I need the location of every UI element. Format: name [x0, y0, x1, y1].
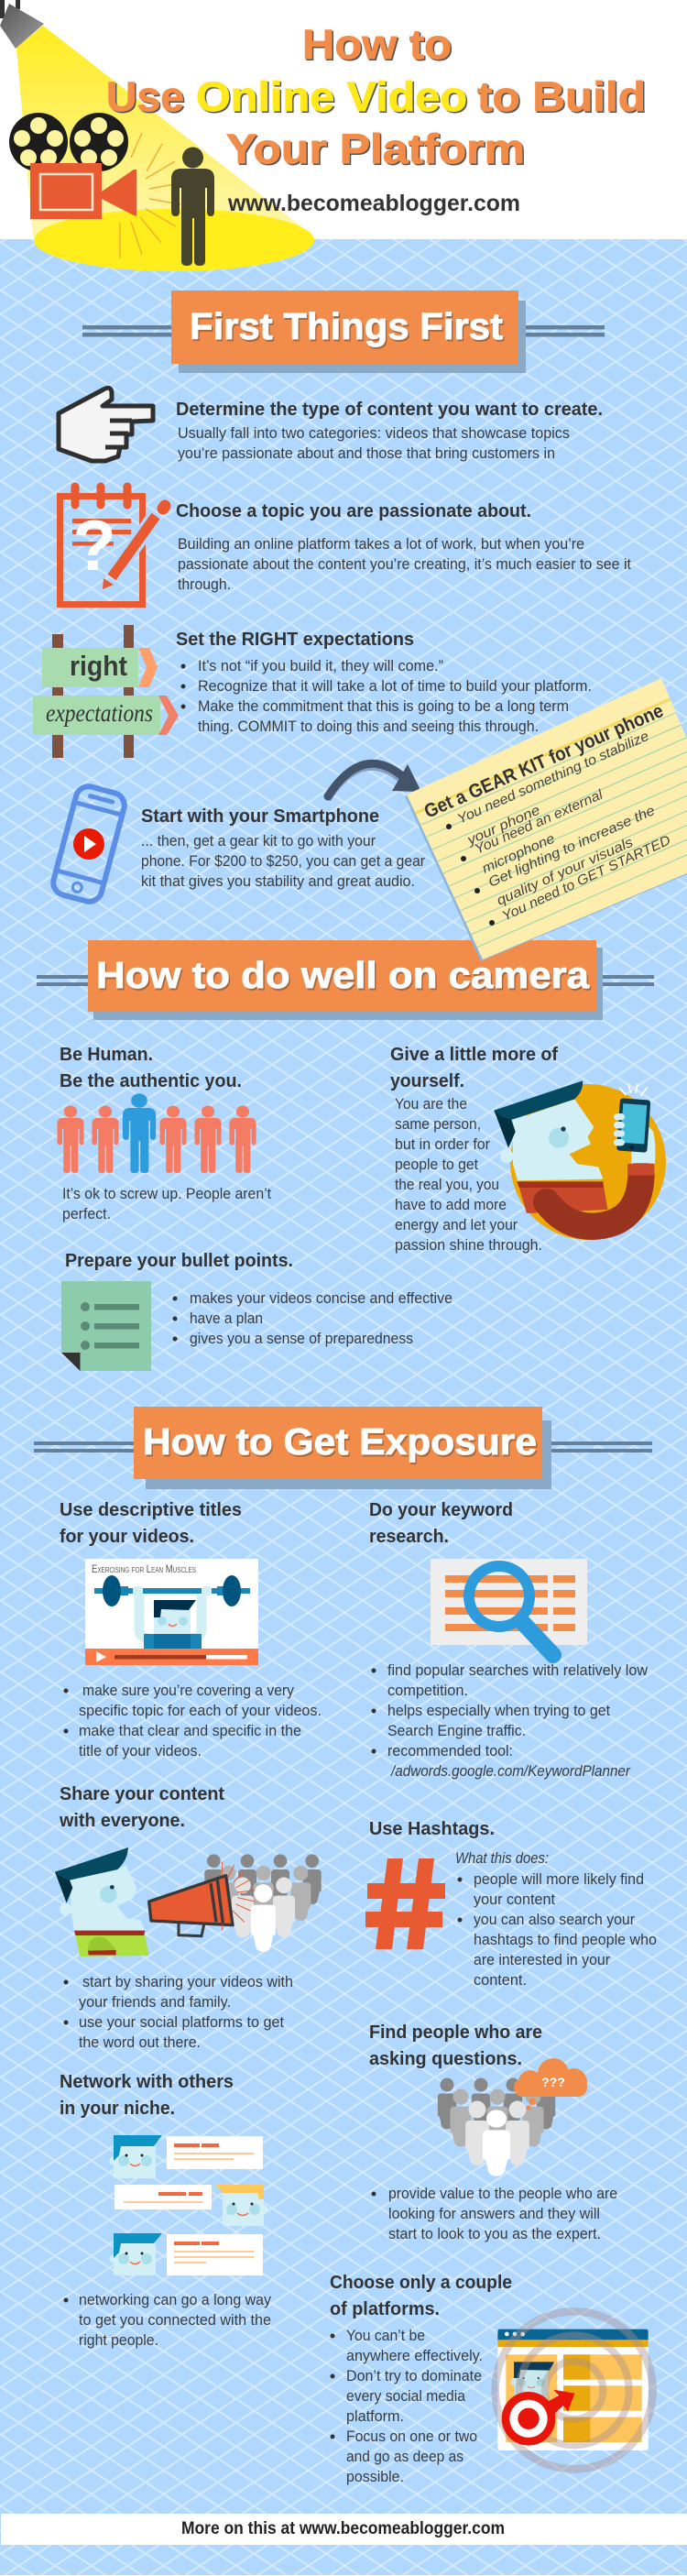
- note card: get a gear kit: quality of your visuals: [495, 834, 636, 909]
- note card: get a gear kit: Get lighting to increase the: [486, 803, 658, 891]
- icon: spotlight and stage: [0, 0, 314, 271]
- text block: choose a topic: Choose a topic you are passionate about.: [176, 501, 531, 521]
- heading: do your keyword research: research.: [369, 1527, 449, 1547]
- text block: start with your smartphone: Start with your Smartphone: [141, 806, 379, 827]
- icon: man holding phone: [494, 1080, 666, 1240]
- bullet list: hashtags: people will more likely find: [474, 1871, 644, 1888]
- text block: give a little more of yourself: same person,: [395, 1116, 481, 1133]
- heading: share your content: Share your content: [60, 1784, 224, 1804]
- text block: determine content type: [176, 400, 603, 462]
- text block: set the right expectations: thing. COMMIT to doing this and seeing this through.: [198, 718, 539, 735]
- note card: get a gear kit: [405, 663, 687, 961]
- bullet list: network: right people.: [79, 2332, 158, 2349]
- bullet list: descriptive titles: title of your videos.: [79, 1743, 202, 1759]
- bullet list: descriptive titles: [64, 1683, 322, 1759]
- title: Use: [106, 73, 184, 120]
- bullet list: hashtags: hashtags to find people who: [474, 1932, 657, 1948]
- text: it's ok to screw up: [62, 1186, 271, 1222]
- heading: do your keyword research: Do your keyword: [369, 1500, 513, 1520]
- title: Online Video: [196, 73, 467, 120]
- text block: give a little more of yourself: energy and let your: [395, 1217, 518, 1233]
- bullet list: hashtags: you can also search your: [474, 1912, 635, 1928]
- icon: notepad and pencil: [60, 487, 165, 605]
- bullet list: network: to get you connected with the: [79, 2312, 271, 2329]
- text block: set the right expectations: Recognize that it will take a lot of time to build your platform.: [198, 678, 592, 695]
- text block: give a little more of yourself: You are the: [395, 1096, 467, 1113]
- text: it's ok to screw up: It’s ok to screw up. People aren’t: [62, 1186, 271, 1202]
- bullet list: choose platforms: [330, 2328, 483, 2485]
- heading: find people who are asking questions: asking questions.: [369, 2049, 522, 2069]
- note card: get a gear kit: microphone: [480, 831, 557, 877]
- bullet list: share your content: start by sharing your videos with: [82, 1974, 293, 1990]
- note card: get a gear kit: You need something to stabilize: [455, 729, 651, 828]
- bullet list: choose platforms: You can’t be: [346, 2328, 425, 2344]
- bullet list: descriptive titles: make sure you’re covering a very: [82, 1683, 295, 1699]
- heading: use hashtags: Use Hashtags.: [369, 1819, 495, 1839]
- arrow: curved arrow to gear kit note: [327, 763, 420, 799]
- icon: film camera: [9, 113, 180, 258]
- bullet list: descriptive titles: specific topic for each of your videos.: [79, 1703, 322, 1719]
- bullet list: prepare your bullet points: gives you a sense of preparedness: [190, 1331, 413, 1347]
- bullet list: choose platforms: possible.: [346, 2469, 404, 2485]
- section banner: First Things First: First Things First: [190, 305, 503, 347]
- icon: pointing hand: [59, 388, 153, 461]
- bullet list: hashtags: are interested in your: [474, 1952, 610, 1968]
- heading: choose only a couple of platforms: [330, 2273, 512, 2319]
- bullet list: choose platforms: platform.: [346, 2408, 404, 2425]
- text block: choose a topic: through.: [178, 576, 231, 593]
- text: it's ok to screw up: perfect.: [62, 1206, 111, 1222]
- text block: determine content type: you’re passionate about and those that bring customers in: [178, 445, 555, 462]
- heading: network with others: in your niche.: [60, 2099, 175, 2119]
- section banner: How to Get Exposure: [34, 1407, 652, 1489]
- section banner: First Things First: [82, 290, 605, 373]
- icon: signpost right expectations: right: [70, 650, 127, 682]
- text block: start with your smartphone: ... then, get a gear kit to go with your: [141, 833, 376, 850]
- bullet list: network: [64, 2292, 272, 2349]
- icon: bullet list document: [61, 1281, 151, 1371]
- text block: give a little more of yourself: but in order for: [395, 1136, 490, 1153]
- section banner: How to Get Exposure: How to Get Exposure: [143, 1420, 537, 1463]
- bullet list: find people: start to look to you as the expert.: [388, 2226, 601, 2242]
- icon: smartphone with play button: [50, 784, 127, 904]
- note card: get a gear kit: Get a GEAR KIT for your phone: [421, 700, 667, 823]
- text block: set the right expectations: Make the commitment that this is going to be a long term: [198, 698, 569, 715]
- text block: start with your smartphone: kit that gives you stability and great audio.: [141, 873, 415, 890]
- icon: row of people with one highlighted: [57, 1093, 256, 1173]
- bullet list: keyword research: [372, 1662, 648, 1780]
- bullet list: prepare your bullet points: [172, 1290, 453, 1347]
- text block: give a little more of yourself: people to get: [395, 1156, 478, 1173]
- note card: get a gear kit: You need an external: [473, 786, 605, 858]
- bullet list: choose platforms: anywhere effectively.: [346, 2348, 483, 2364]
- text block: be human: [60, 1045, 242, 1091]
- bullet list: keyword research: /adwords.google.com/KeywordPlanner: [390, 1763, 631, 1780]
- bullet list: choose platforms: Focus on one or two: [346, 2428, 477, 2445]
- bullet list: share your content: [64, 1974, 293, 2051]
- text block: give a little more of yourself: Give a little more of: [390, 1045, 558, 1065]
- text block: start with your smartphone: phone. For $200 to $250, you can get a gear: [141, 853, 425, 870]
- text block: set the right expectations: It’s not “if you build it, they will come.”: [198, 658, 443, 674]
- bullet list: descriptive titles: make that clear and specific in the: [79, 1723, 301, 1739]
- heading: share your content: with everyone.: [59, 1811, 185, 1831]
- text block: be human: Be the authentic you.: [60, 1071, 242, 1091]
- text block: give a little more of yourself: [390, 1045, 558, 1254]
- section banner: How to do well on camera: [37, 940, 654, 1020]
- bullet list: keyword research: find popular searches with relatively low: [387, 1662, 648, 1679]
- footer bar: [1, 2514, 687, 2545]
- bullet list: keyword research: competition.: [387, 1683, 468, 1699]
- title: Your Platform: [226, 126, 525, 172]
- bullet list: network: networking can go a long way: [79, 2292, 272, 2308]
- heading: choose only a couple of platforms: Choose only a couple: [330, 2273, 512, 2293]
- text block: give a little more of yourself: the real you, you: [395, 1177, 499, 1193]
- text block: set the right expectations: [176, 630, 592, 735]
- text block: choose a topic: [176, 501, 631, 593]
- bullet list: keyword research: recommended tool:: [387, 1743, 513, 1759]
- text block: choose a topic: Building an online platform takes a lot of work, but when you’re: [178, 536, 584, 553]
- bullet list: keyword research: helps especially when trying to get: [387, 1703, 610, 1719]
- bullet list: share your content: use your social platforms to get: [79, 2014, 284, 2031]
- illustration: crowd with question cloud: ???: [541, 2075, 565, 2089]
- footer bar: More on this at www.becomeablogger.com: [181, 2519, 505, 2538]
- text block: start with your smartphone: [141, 806, 425, 890]
- text block: be human: Be Human.: [60, 1045, 153, 1065]
- illustration: video thumbnail of man lifting barbell: Exercising for Lean Muscles: [92, 1562, 196, 1575]
- text block: set the right expectations: Set the RIGHT expectations: [176, 630, 414, 650]
- heading: use descriptive titles: Use descriptive titles: [60, 1500, 242, 1520]
- text block: determine content type: Usually fall into two categories: videos that showcase topics: [178, 425, 570, 442]
- illustration: browser window with target: [496, 2311, 653, 2469]
- text block: give a little more of yourself: have to add more: [395, 1197, 507, 1213]
- heading: do your keyword research: [369, 1500, 513, 1547]
- bullet list: find people: provide value to the people who are: [388, 2186, 617, 2202]
- illustration: man with megaphone and crowd: [55, 1847, 322, 1957]
- bullet list: keyword research: Search Engine traffic.: [387, 1723, 526, 1739]
- text block: give a little more of yourself: passion shine through.: [395, 1237, 542, 1254]
- bullet list: choose platforms: every social media: [346, 2388, 466, 2405]
- bullet list: hashtags: [455, 1850, 657, 1989]
- heading: network with others: Network with others: [60, 2072, 234, 2092]
- heading: use descriptive titles: [60, 1500, 242, 1547]
- bullet list: prepare your bullet points: have a plan: [190, 1310, 263, 1327]
- icon: standing person: [171, 147, 214, 266]
- heading: choose only a couple of platforms: of platforms.: [330, 2299, 440, 2319]
- icon: signpost right expectations: expectations: [46, 699, 153, 727]
- text block: give a little more of yourself: yourself.: [390, 1071, 464, 1091]
- illustration: crowd with question cloud: [438, 2058, 587, 2176]
- text block: choose a topic: passionate about the content you’re creating, it’s much easier to see it: [178, 556, 631, 573]
- bullet list: choose platforms: and go as deep as: [346, 2449, 463, 2465]
- heading: network with others: [60, 2072, 234, 2119]
- icon: hashtag: [365, 1858, 445, 1949]
- icon: notepad and pencil: ?: [72, 505, 116, 586]
- website url: www.becomeablogger.com: [227, 191, 520, 216]
- bullet list: prepare your bullet points: makes your videos concise and effective: [190, 1290, 453, 1307]
- heading: use descriptive titles: for your videos.: [60, 1527, 194, 1547]
- bullet list: share your content: the word out there.: [79, 2034, 201, 2051]
- bullet list: hashtags: What this does:: [455, 1850, 549, 1867]
- bullet list: hashtags: your content: [474, 1891, 555, 1908]
- title: to Build: [477, 73, 646, 120]
- heading: find people who are asking questions: Find people who are: [369, 2022, 542, 2043]
- note card: get a gear kit: your phone: [464, 803, 542, 849]
- illustration: network profile cards: [110, 2135, 267, 2275]
- icon: signpost right expectations: [33, 625, 179, 758]
- illustration: video thumbnail of man lifting barbell: [85, 1559, 258, 1665]
- text block: determine content type: Determine the type of content you want to create.: [176, 400, 603, 420]
- note card: get a gear kit: You need to GET STARTED: [500, 832, 673, 925]
- section banner: How to do well on camera: How to do well on camera: [96, 954, 590, 996]
- title: How to: [302, 21, 452, 68]
- illustration: magnifier over keyword list: [431, 1559, 587, 1655]
- heading: prepare your bullet points: Prepare your bullet points.: [65, 1251, 293, 1271]
- bullet list: hashtags: content.: [474, 1972, 527, 1989]
- bullet list: find people: looking for answers and they will: [388, 2206, 600, 2222]
- bullet list: share your content: your friends and family.: [79, 1994, 231, 2011]
- heading: find people who are asking questions: [369, 2022, 542, 2069]
- bullet list: choose platforms: Don’t try to dominate: [346, 2368, 482, 2384]
- title: [106, 21, 646, 172]
- bullet list: find people: [372, 2186, 617, 2242]
- heading: share your content: [59, 1784, 224, 1831]
